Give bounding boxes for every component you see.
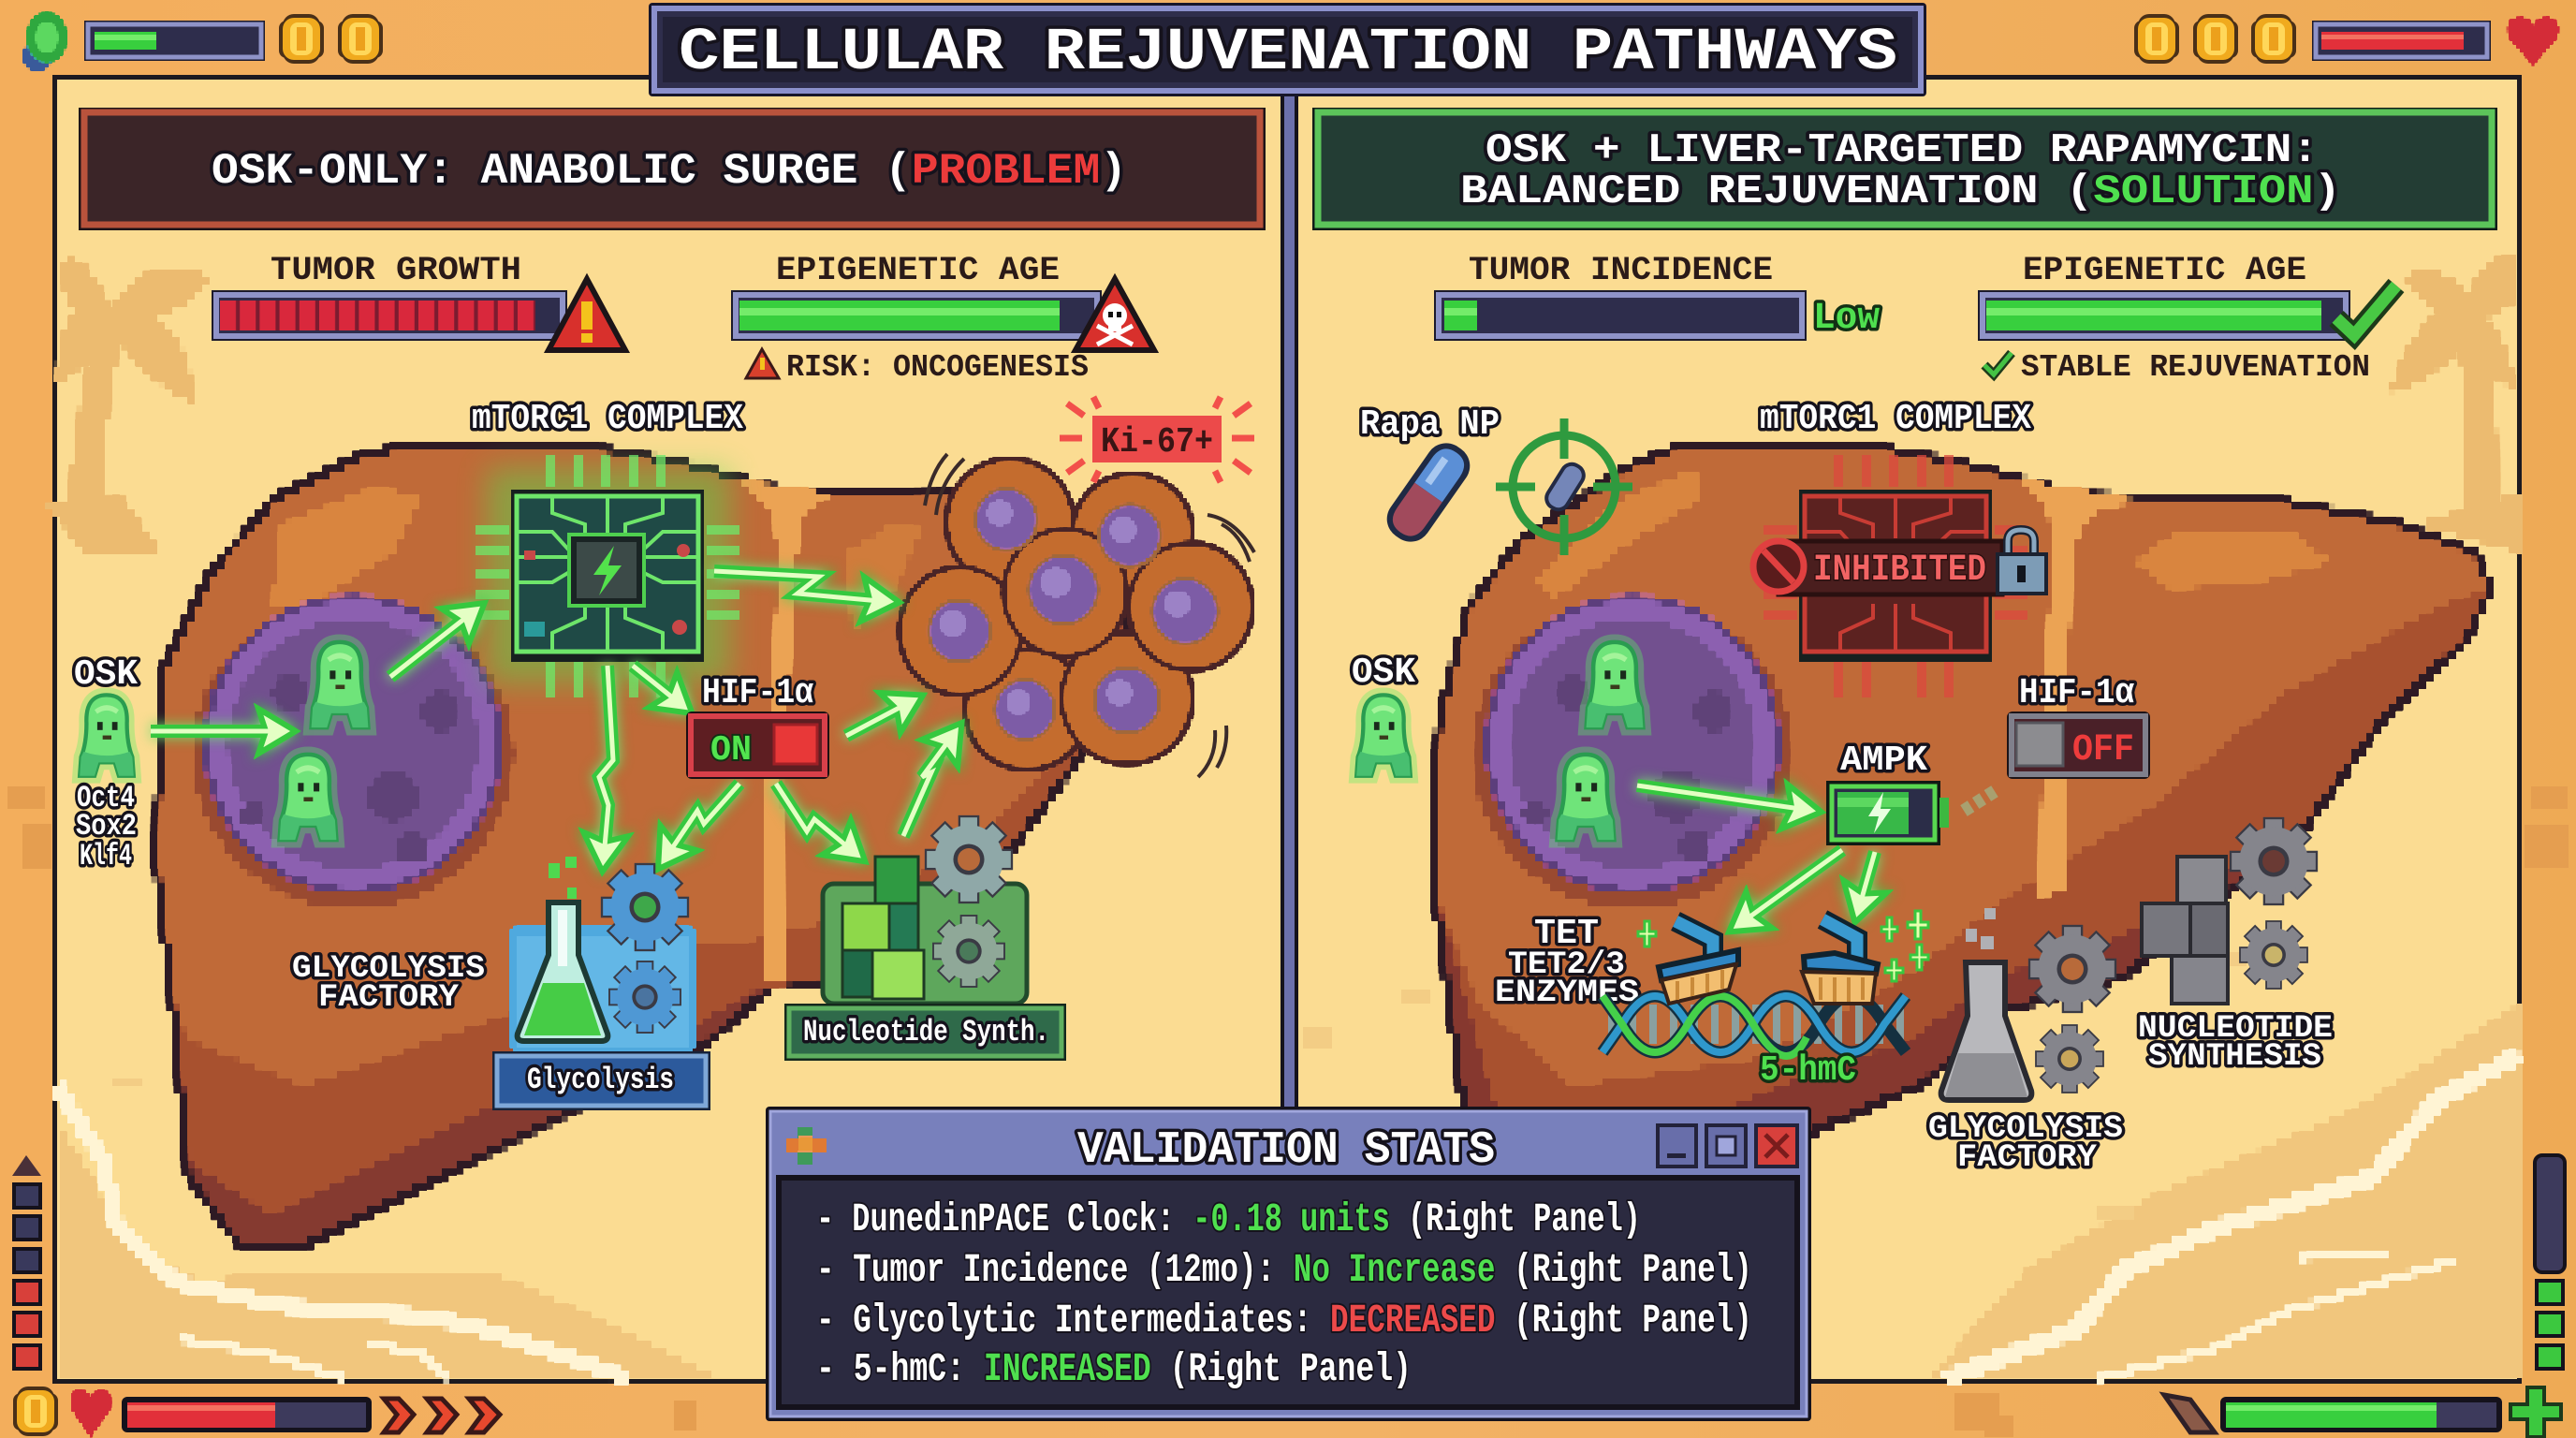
meter: epigenetic age stable xyxy=(1978,252,2396,341)
label and capsule: Rapa NP xyxy=(1360,404,1500,550)
health bar: bottom green xyxy=(2220,1397,2502,1432)
left panel header xyxy=(79,108,1266,230)
badge: Ki-67+ xyxy=(1060,397,1254,482)
labels: Oct4 Sox2 Klf4: Sox2 xyxy=(76,809,137,844)
label: glycolysis factory xyxy=(292,951,485,1016)
switch: HIF-1a on: HIF-1α xyxy=(702,673,813,713)
label: glycolysis factory right xyxy=(1928,1111,2123,1176)
icon: glycolysis factory xyxy=(509,857,696,1051)
right panel header: BALANCED REJUVENATION ( SOLUTION ) xyxy=(1460,169,2341,215)
stats list xyxy=(779,1178,1797,1407)
meter: epigenetic age: EPIGENETIC AGE xyxy=(776,252,1060,289)
switch: HIF-1a off xyxy=(2007,673,2150,779)
hud: bottom left xyxy=(13,1387,500,1437)
icon: coins xyxy=(279,14,383,64)
meter: tumor incidence: Low xyxy=(1813,298,1880,340)
icon: globe xyxy=(22,12,67,71)
switch: HIF-1a off: HIF-1α xyxy=(2019,673,2134,713)
icon: OSK factor right xyxy=(1352,653,1415,776)
dotted inhibition arrow xyxy=(1964,788,1999,811)
label: TET enzymes: TET xyxy=(1534,914,1599,954)
label: nucleotide synthesis: NUCLEOTIDE xyxy=(2138,1011,2333,1047)
icon: AMPK battery: AMPK xyxy=(1840,741,1927,781)
icon: bottom heart xyxy=(70,1389,111,1437)
right panel header xyxy=(1312,108,2497,230)
icon: DNA helix xyxy=(1603,996,1906,1056)
left liver illustration xyxy=(152,440,1133,1249)
label: nucleotide synth: Nucleotide Synth. xyxy=(803,1015,1049,1049)
label: mTORC1 complex right: mTORC1 COMPLEX xyxy=(1760,399,2031,439)
icon: factors in nucleus right xyxy=(1558,642,1643,840)
icon: check mark xyxy=(2336,286,2396,335)
icon: heart xyxy=(2508,17,2559,66)
label: TET enzymes: TET2/3 xyxy=(1508,947,1625,983)
label: TET enzymes: ENZYMES xyxy=(1495,976,1639,1011)
icon: scrub brushes xyxy=(1659,919,1878,1004)
health bar: bottom red xyxy=(122,1397,372,1432)
hud: top right xyxy=(2134,14,2559,66)
label: nucleotide synthesis xyxy=(2138,1011,2333,1075)
right liver illustration xyxy=(1432,440,2495,1217)
panel: OSK-only (problem) xyxy=(74,108,1266,1249)
hud: top left xyxy=(22,12,383,71)
chip: active mTORC1 xyxy=(476,455,739,697)
labels: Oct4 Sox2 Klf4 xyxy=(76,781,137,873)
banner: inhibited: INHIBITED xyxy=(1813,550,1986,592)
right panel header: OSK + LIVER-TARGETED RAPAMYCIN: xyxy=(1486,127,2319,174)
margin dust xyxy=(7,786,2569,1434)
risk note: RISK: ONCOGENESIS xyxy=(786,350,1089,385)
icon: factors in nucleus xyxy=(280,642,368,840)
banner: inhibited xyxy=(1753,541,2002,594)
meter: tumor incidence: TUMOR INCIDENCE xyxy=(1469,252,1773,289)
meter: tumor incidence xyxy=(1434,252,1880,341)
panel: OSK + rapamycin (solution) xyxy=(1312,108,2497,1217)
label: mTORC1 complex: mTORC1 COMPLEX xyxy=(472,399,743,439)
label: glycolysis factory right: GLYCOLYSIS xyxy=(1928,1111,2123,1147)
labels: Oct4 Sox2 Klf4: Klf4 xyxy=(80,839,132,873)
switch: HIF-1a off: OFF xyxy=(2072,729,2134,771)
label: glycolysis factory: FACTORY xyxy=(318,980,460,1016)
meter: tumor growth: TUMOR GROWTH xyxy=(271,252,521,289)
labels: Oct4 Sox2 Klf4: Oct4 xyxy=(77,781,135,815)
stats list: - Glycolytic Intermediates: DECREASED (Right Panel) xyxy=(816,1298,1752,1343)
label: TET enzymes xyxy=(1495,914,1639,1011)
icon: bottom coin xyxy=(13,1387,58,1436)
hud: right side stack xyxy=(2535,1155,2565,1369)
icon: plus xyxy=(2510,1387,2561,1437)
window buttons xyxy=(1658,1125,1797,1167)
meter: epigenetic age xyxy=(731,252,1154,350)
switch: HIF-1a on xyxy=(686,673,829,779)
title banner xyxy=(649,3,1926,96)
meter: tumor growth xyxy=(212,252,625,350)
window: validation stats xyxy=(766,1107,1811,1421)
icon: warning triangle xyxy=(549,279,625,350)
badge: Ki-67+: Ki-67+ xyxy=(1101,422,1213,462)
icon: coins right xyxy=(2134,14,2296,64)
center divider xyxy=(1281,80,1298,1119)
icon: target reticle xyxy=(1496,418,1632,555)
label and capsule: Rapa NP: Rapa NP xyxy=(1360,404,1500,445)
icon: chevrons xyxy=(384,1399,500,1432)
icon: green flask xyxy=(518,902,607,1041)
icon: padlock xyxy=(1998,530,2046,594)
chip: inhibited mTORC1 xyxy=(1753,455,2046,697)
icon: OSK factor right: OSK xyxy=(1352,653,1415,693)
label: glycolysis: Glycolysis xyxy=(527,1063,674,1097)
sparkles xyxy=(1638,911,1928,981)
stats list: - DunedinPACE Clock: -0.18 units (Right Panel) xyxy=(816,1196,1641,1242)
title banner: CELLULAR REJUVENATION PATHWAYS xyxy=(679,20,1897,87)
label: glycolysis xyxy=(492,1051,710,1110)
hud: bottom right xyxy=(2164,1387,2561,1437)
stats list: - 5-hmC: INCREASED (Right Panel) xyxy=(816,1346,1412,1392)
switch: HIF-1a on: ON xyxy=(710,730,752,770)
icon: OSK factor xyxy=(74,654,138,776)
health bar: green xyxy=(84,21,265,61)
health bar: red xyxy=(2312,21,2491,61)
icon: window flower xyxy=(786,1128,826,1164)
stats list: - Tumor Incidence (12mo): No Increase (Right Panel) xyxy=(816,1247,1752,1293)
label: 5-hmC: 5-hmC xyxy=(1760,1050,1856,1091)
label: glycolysis factory right: FACTORY xyxy=(1957,1140,2098,1176)
icon: OSK factor: OSK xyxy=(74,654,138,695)
left panel header: OSK-ONLY: ANABOLIC SURGE ( PROBLEM) xyxy=(212,147,1127,196)
meter: epigenetic age stable: EPIGENETIC AGE xyxy=(2023,252,2306,289)
tumor cell cluster xyxy=(900,454,1254,777)
hud: left side stack xyxy=(12,1155,41,1369)
arrows: AMPK signalling xyxy=(1637,785,1875,923)
icon: nucleotide synthesis xyxy=(823,816,1027,1004)
icon: quill xyxy=(2164,1395,2215,1432)
icon: grey cogs xyxy=(2029,818,2317,1093)
stable note: STABLE REJUVENATION xyxy=(2021,350,2370,385)
icon: AMPK battery xyxy=(1826,741,1949,845)
label: nucleotide synthesis: SYNTHESIS xyxy=(2148,1039,2321,1075)
icon: grey flask xyxy=(1941,908,2031,1100)
icon: skull warning xyxy=(1076,279,1154,350)
label: nucleotide synth xyxy=(784,1004,1066,1061)
arrows: anabolic signalling xyxy=(151,571,953,857)
sand dunes and palms xyxy=(47,256,2520,1379)
window title: VALIDATION STATS xyxy=(1077,1125,1495,1176)
icon: grey nucleotide blocks xyxy=(2142,857,2228,1004)
label: glycolysis factory: GLYCOLYSIS xyxy=(292,951,485,987)
